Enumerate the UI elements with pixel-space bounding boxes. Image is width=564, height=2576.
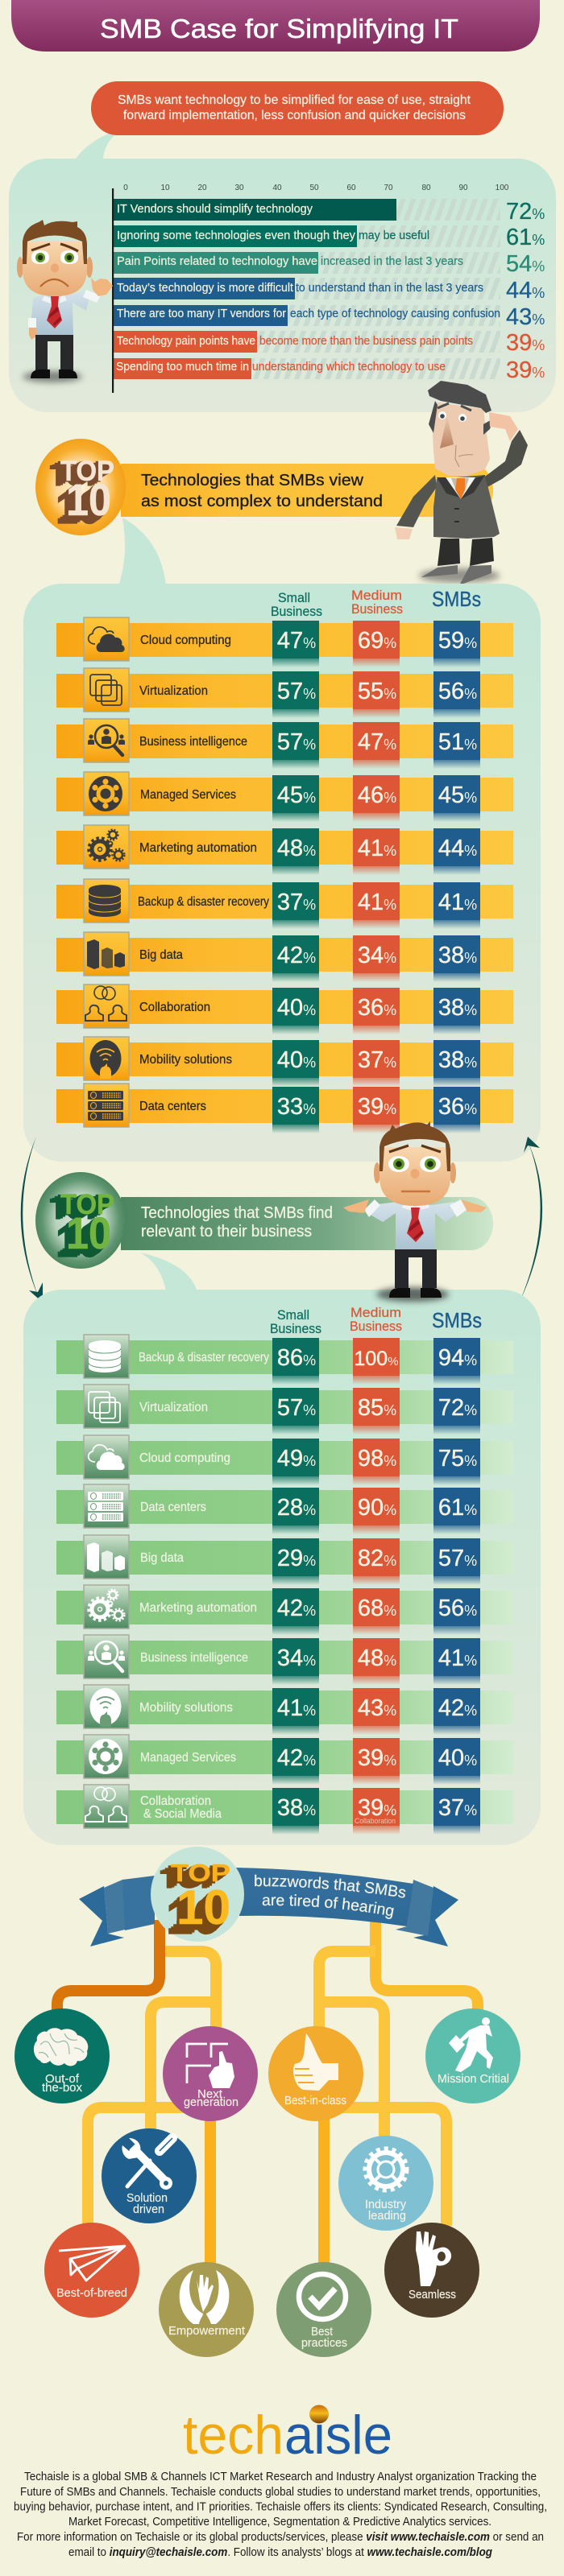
row: Cloud computing: Cloud computing (140, 634, 231, 647)
row: Managed Services: Managed Services (140, 1751, 236, 1765)
row: Managed Services: 45% (438, 782, 477, 808)
emblem: top 10 green: TOP (52, 1193, 106, 1224)
row: Collaboration (56, 985, 513, 1034)
chart: horizontal bars: There are too many IT vendors for (117, 308, 286, 320)
emblem: top 10 green: TOP (58, 1190, 112, 1221)
row: Data centers (56, 1484, 513, 1534)
row: Business intelligence: 41% (438, 1645, 477, 1671)
row: Business intelligence: 47% (358, 729, 396, 755)
row: Data centers: 90% (358, 1495, 396, 1521)
column headings (270, 1305, 482, 1336)
row: Marketing automation: 56% (438, 1596, 477, 1621)
emblem: top 10 gold: 10 (174, 1883, 228, 1937)
chart: horizontal bars: understanding which technology to use (252, 361, 446, 374)
emblem: top 10 green: 10 (56, 1216, 101, 1266)
row: Business intelligence: Business intelligence (139, 735, 247, 749)
percentage column: 39% (506, 330, 545, 356)
chart: horizontal bars: Spending too much time in (116, 361, 249, 374)
row: Backup and disaster recovery: 100% (354, 1348, 399, 1370)
buzzword: Industry leading: leading (368, 2209, 406, 2223)
arrow: left curved, pointing down (21, 1137, 43, 1302)
column headings: SMBs (432, 1308, 482, 1332)
row: Data centers: 28% (277, 1495, 316, 1521)
row: Backup and disaster recovery: 94% (438, 1345, 477, 1371)
buzzword: Best practices: practices (301, 2336, 347, 2350)
row: Mobility solutions: 38% (438, 1047, 477, 1073)
buzzword: Next generation: Next (197, 2087, 223, 2101)
footer: about Techaisle: Market Forecast, Competitive Intelligence, Segmentation & Predictive Analytics services. (68, 2515, 491, 2529)
row: Mobility solutions: 43% (358, 1695, 396, 1721)
buzzword: Best-in-class: Best-in-class (284, 2094, 346, 2107)
row: Backup and disaster recovery: 86% (277, 1345, 316, 1371)
row: Business intelligence: 34% (277, 1645, 316, 1671)
chart: horizontal bars: 20 (197, 184, 207, 192)
emblem: top 10 orange (35, 439, 126, 535)
row: Cloud computing (56, 1435, 513, 1485)
emblem: top 10 gold (151, 1847, 244, 1944)
buzzword: Industry leading: Industry (365, 2198, 406, 2211)
row: Collaboration: 40% (277, 995, 316, 1021)
row: Mobility solutions: 37% (358, 1047, 396, 1073)
emblem: top 10 orange: TOP (55, 458, 109, 489)
row: Mobility solutions: 40% (277, 1047, 316, 1073)
row: Managed Services (56, 1735, 513, 1785)
emblem: top 10 orange: 10 (66, 474, 111, 525)
row: Managed Services: 40% (438, 1745, 477, 1771)
row: Backup and disaster recovery: 41% (438, 890, 477, 915)
footer: about Techaisle: For more information on Techaisle or its global products/services, please visit www.techaisle.com or send an (17, 2530, 544, 2544)
row: Cloud computing: 98% (358, 1446, 396, 1472)
chart: horizontal bars: increased in the last 3 years (321, 255, 463, 268)
row: Big data: 57% (438, 1546, 477, 1571)
row: Data centers: 61% (438, 1495, 477, 1521)
emblem: top 10 orange: 10 (58, 481, 103, 531)
footer: about Techaisle: email to inquiry@techaisle.com. Follow its analysts’ blogs at www.techaisle.com/blog (68, 2545, 492, 2559)
row: Cloud computing (56, 617, 513, 667)
emblem: top 10 gold: 10 (166, 1890, 220, 1944)
row: Data centers: 33% (277, 1094, 316, 1120)
chart: horizontal bars: 90 (458, 184, 468, 192)
row: Virtualization: 55% (358, 679, 396, 704)
column headings: Small (278, 590, 310, 605)
row: Marketing automation: 42% (277, 1596, 316, 1621)
panel: most relevant technologies table (23, 1290, 541, 1845)
chart: horizontal bars: 50 (309, 184, 319, 192)
row: Mobility solutions: 41% (277, 1695, 316, 1721)
row: Business intelligence (56, 719, 513, 769)
icon: thumbs up (293, 2033, 338, 2091)
row: Big data: 38% (438, 943, 477, 968)
row: Cloud computing: 59% (438, 628, 477, 654)
icon: OK hand (416, 2231, 451, 2286)
row: Marketing automation (56, 1585, 513, 1635)
buzzword: Empowerment (159, 2262, 254, 2357)
column headings: Small (277, 1307, 309, 1323)
row: Marketing automation: 68% (358, 1596, 396, 1621)
chart: horizontal bars: 0 (123, 184, 128, 192)
buzzword: Best practices: Best (311, 2325, 334, 2339)
buzzword: Best-of-breed (44, 2223, 139, 2318)
arrow: right curved, pointing up (520, 1137, 542, 1302)
buzzword: Next generation (163, 2026, 258, 2121)
row: Backup and disaster recovery: Backup & disaster recovery (139, 1351, 269, 1364)
chart: horizontal bars: Pain Points related to technology have (117, 255, 317, 268)
panel: simplification survey chart (9, 159, 556, 412)
row: Collaboration: 36% (358, 995, 396, 1021)
buzzword: Best-in-class (268, 2026, 363, 2121)
emblem: top 10 green: TOP (50, 1194, 104, 1225)
row: Collaboration and social media: Collaboration (140, 1794, 211, 1808)
row: Data centers: Data centers (140, 1501, 206, 1514)
chart: horizontal bars: 70 (384, 184, 393, 192)
emblem: top 10 orange: TOP (60, 456, 114, 487)
row: Collaboration and social media: 38% (277, 1795, 316, 1821)
row: Collaboration and social media: 39% (358, 1795, 396, 1821)
emblem: top 10 green: TOP (60, 1189, 114, 1220)
emblem: top 10 gold: TOP (168, 1860, 228, 1889)
chart: horizontal bars: 30 (234, 184, 244, 192)
callout: why simplify: SMBs want technology to be simplified for ease of use, straight (118, 93, 471, 107)
row: Big data: Big data (140, 1551, 184, 1565)
row: Mobility solutions: 42% (438, 1695, 477, 1721)
emblem: top 10 gold: TOP (160, 1865, 220, 1893)
emblem: top 10 gold: TOP (171, 1859, 230, 1887)
row: Marketing automation: 44% (438, 836, 477, 861)
banner heading: Technologies that SMBs find (141, 1204, 333, 1222)
row: Managed Services: 39% (358, 1745, 396, 1771)
emblem: top 10 gold: TOP (165, 1863, 225, 1891)
row: Virtualization (56, 668, 513, 718)
row: Big data (56, 1535, 513, 1585)
row: Collaboration and social media: & Social Media (143, 1807, 222, 1821)
row: Backup and disaster recovery: Backup & disaster recovery (138, 895, 269, 909)
row: Collaboration and social media: Collaboration (355, 1817, 396, 1825)
percentage column: 61% (506, 225, 545, 250)
chart: horizontal bars: 10 (160, 184, 170, 192)
buzzword: Seamless: Seamless (408, 2288, 456, 2301)
row: Business intelligence: Business intelligence (140, 1651, 248, 1665)
row: Big data: 29% (277, 1546, 316, 1571)
column headings: Business (350, 1319, 402, 1334)
banner heading: Technologies that SMBs view (141, 471, 363, 489)
row: Managed Services: 42% (277, 1745, 316, 1771)
buzzword: Best-of-breed: Best-of-breed (56, 2286, 127, 2300)
chart: horizontal bars: IT Vendors should simplify technology (117, 203, 313, 216)
row: Virtualization: 57% (277, 679, 316, 704)
row: Collaboration and social media: 37% (438, 1795, 477, 1821)
row: Virtualization: 57% (277, 1395, 316, 1421)
percentage column: 39% (506, 357, 545, 383)
row: Cloud computing: 69% (358, 628, 396, 654)
character: worried man pointing at chart (17, 220, 113, 382)
chart: horizontal bars: become more than the business pain points (259, 335, 473, 348)
row: Cloud computing: 49% (277, 1446, 316, 1472)
row: Backup and disaster recovery (56, 1335, 513, 1385)
icon: wrench and screwdriver (122, 2138, 172, 2190)
buzzword: Industry leading (338, 2136, 433, 2231)
row: Big data: 42% (277, 943, 316, 968)
row: Backup and disaster recovery: 41% (358, 890, 396, 915)
row: Data centers (56, 1084, 513, 1133)
ribbon: buzzwords heading: buzzwords that SMBs (255, 1874, 406, 1898)
emblem: top 10 gold: 10 (171, 1886, 225, 1940)
section: top 10 complex technologies (35, 381, 528, 586)
row: Marketing automation: 48% (277, 836, 316, 861)
callout tail (74, 126, 129, 161)
row: Virtualization (56, 1385, 513, 1435)
icon: brain (34, 2028, 88, 2066)
column headings: SMBs (432, 587, 481, 611)
row: Big data: Big data (139, 948, 183, 962)
icon: paper plane (59, 2246, 125, 2281)
row: Backup and disaster recovery (56, 879, 513, 929)
icon: check mark in circle (299, 2274, 346, 2319)
emblem: top 10 orange: 10 (60, 479, 106, 530)
row: Marketing automation: 41% (358, 836, 396, 861)
character: thinking man in grey suit (395, 381, 528, 585)
emblem: top 10 gold: TOP (163, 1864, 222, 1893)
emblem: top 10 gold: 10 (168, 1889, 222, 1942)
percentage column: 72% (506, 199, 545, 225)
row: Business intelligence: 51% (438, 729, 477, 755)
row: Data centers: 39% (358, 1094, 396, 1120)
row: Virtualization: Virtualization (139, 1401, 208, 1414)
column headings (271, 587, 481, 619)
emblem: top 10 orange: TOP (50, 460, 104, 492)
row: Managed Services: 46% (358, 782, 396, 808)
row: Cloud computing: Cloud computing (139, 1451, 230, 1465)
row: Big data (56, 932, 513, 982)
emblem: top 10 green: 10 (66, 1208, 111, 1258)
column headings: Medium (351, 588, 402, 603)
row: Business intelligence (56, 1635, 513, 1685)
section: top 10 relevant technologies (35, 1172, 493, 1292)
row: Big data: 34% (358, 943, 396, 968)
ribbon: buzzwords heading (79, 1868, 458, 1946)
row: Backup and disaster recovery: 37% (277, 890, 316, 915)
percentage column (506, 199, 545, 383)
banner heading: relevant to their business (141, 1223, 312, 1241)
buzzword: Out-of-the-box: the-box (42, 2081, 82, 2095)
row: Managed Services (56, 772, 513, 822)
icon: hand between wings (180, 2270, 229, 2324)
row: Business intelligence: 57% (277, 729, 316, 755)
chart: horizontal bars: 80 (421, 184, 431, 192)
banner heading (121, 1197, 493, 1250)
buzzword: Mission Critial (425, 2008, 520, 2103)
row: Managed Services: Managed Services (140, 788, 236, 802)
row: Cloud computing: 75% (438, 1446, 477, 1472)
logo: techaisle (183, 2405, 392, 2466)
chart: horizontal bars: Ignoring some technologies even though they (117, 229, 356, 242)
row: Mobility solutions: Mobility solutions (139, 1701, 233, 1715)
percentage column: 43% (506, 304, 545, 330)
banner heading (121, 464, 493, 517)
row: Marketing automation (56, 825, 513, 875)
emblem: top 10 orange: TOP (58, 456, 112, 488)
emblem: top 10 orange: 10 (56, 482, 101, 533)
row: Big data: 82% (358, 1546, 396, 1571)
row: Mobility solutions (56, 1037, 513, 1087)
column headings: Business (270, 1321, 321, 1336)
row: Virtualization: 72% (438, 1395, 477, 1421)
callout: why simplify (91, 81, 504, 135)
emblem: top 10 green: 10 (58, 1214, 103, 1265)
character: shrugging man (343, 1121, 487, 1302)
row: Virtualization: 56% (438, 679, 477, 704)
buzzword: Out-of-the-box (15, 2008, 110, 2103)
row: Collaboration: Collaboration (139, 1001, 210, 1014)
icon: running businessman (449, 2017, 493, 2072)
panel: most complex technologies table (23, 584, 541, 1162)
icon: touch hand and frames (187, 2044, 234, 2088)
column headings: Business (351, 601, 403, 617)
buzzword: Best practices (276, 2262, 371, 2357)
ribbon: buzzwords heading: are tired of hearing (263, 1894, 394, 1919)
column headings: Business (271, 604, 322, 619)
chart: horizontal bars (112, 184, 509, 393)
emblem: top 10 orange: 10 (64, 476, 109, 526)
row: Marketing automation: Marketing automation (139, 1601, 257, 1615)
row: Business intelligence: 48% (358, 1645, 396, 1671)
row: Managed Services: 45% (277, 782, 316, 808)
emblem: top 10 green: 10 (60, 1212, 106, 1263)
chart: horizontal bars: each type of technology causing confusion (290, 308, 500, 320)
chart: horizontal bars: may be useful (359, 229, 429, 242)
buzzword: Empowerment: Empowerment (168, 2324, 246, 2338)
buzzword: Out-of-the-box: Out-of (45, 2072, 80, 2086)
percentage column: 54% (506, 251, 545, 277)
row: Marketing automation: Marketing automation (139, 841, 257, 855)
chart: horizontal bars: Technology pain points have (117, 335, 255, 348)
buzzword: Next generation: generation (184, 2095, 238, 2109)
chart: horizontal bars: 60 (346, 184, 356, 192)
column headings: Medium (350, 1305, 401, 1320)
connectors: buzzword tree (57, 1920, 478, 2264)
row: Collaboration and social media (56, 1785, 513, 1835)
emblem: top 10 green: 10 (64, 1209, 109, 1260)
row: Virtualization: 85% (358, 1395, 396, 1421)
callout: why simplify: forward implementation, less confusion and quicker decisions (123, 109, 466, 122)
banner heading: as most complex to understand (141, 492, 383, 510)
emblem: top 10 green (35, 1172, 126, 1269)
row: Mobility solutions (56, 1685, 513, 1735)
title banner (11, 0, 540, 52)
chart: horizontal bars: to understand than in the last 3 years (296, 282, 483, 295)
percentage column: 44% (506, 278, 545, 303)
title banner: SMB Case for Simplifying IT (100, 14, 458, 43)
row: Mobility solutions: Mobility solutions (139, 1053, 232, 1067)
row: Cloud computing: 47% (277, 628, 316, 654)
logo: techaisle: tech (183, 2405, 284, 2466)
chart: horizontal bars: Today’s technology is more difficult (117, 282, 293, 295)
emblem: top 10 green: TOP (55, 1191, 109, 1223)
buzzword: Mission Critial: Mission Critial (438, 2072, 509, 2086)
buzzword: Solution driven: Solution (126, 2191, 168, 2205)
row: Data centers: Data centers (139, 1100, 206, 1113)
row: Data centers: 36% (438, 1094, 477, 1120)
buzzword: Seamless (384, 2223, 479, 2318)
chart: horizontal bars: 40 (272, 184, 282, 192)
buzzword: Solution driven: driven (133, 2202, 164, 2216)
emblem: top 10 gold: 10 (176, 1880, 230, 1934)
row: Collaboration: 38% (438, 995, 477, 1021)
row: Virtualization: Virtualization (139, 684, 208, 698)
buzzword: Solution driven (102, 2128, 197, 2223)
emblem: top 10 orange: TOP (52, 460, 106, 491)
footer: about Techaisle (14, 2470, 547, 2559)
icon: gear (365, 2149, 407, 2190)
logo: techaisle: aisle (284, 2405, 392, 2466)
chart: horizontal bars: 100 (496, 184, 509, 192)
